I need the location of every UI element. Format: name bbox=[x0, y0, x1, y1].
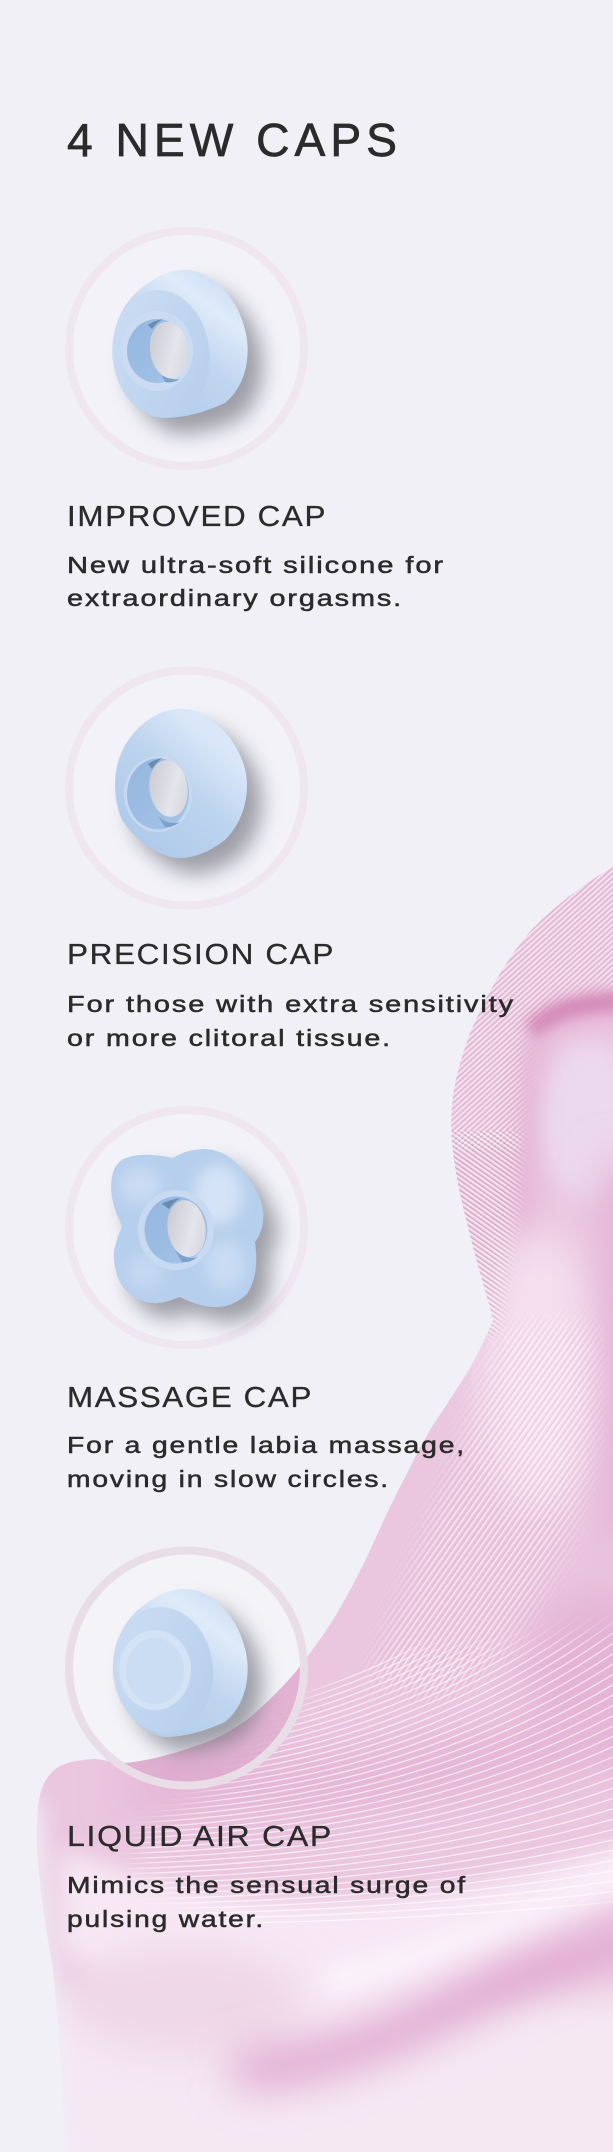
panel: massage cap bbox=[67, 1110, 466, 1492]
liquid air cap description: pulsing water. bbox=[67, 1906, 265, 1932]
improved cap description: extraordinary orgasms. bbox=[67, 585, 403, 611]
liquid air cap heading: LIQUID AIR CAP bbox=[67, 1821, 333, 1853]
improved cap ring bbox=[69, 231, 304, 466]
liquid air cap description bbox=[67, 1872, 467, 1932]
circle interior: liquid air cap glow bbox=[68, 1550, 304, 1786]
precision cap heading: PRECISION CAP bbox=[67, 939, 335, 971]
soft fade along fabric lower left edge bbox=[28, 1800, 56, 2152]
massage cap description: For a gentle labia massage, bbox=[67, 1432, 466, 1458]
pink wavy fabric background bbox=[0, 850, 613, 2152]
liquid air cap ring bbox=[69, 1550, 304, 1786]
panel: precision cap bbox=[67, 670, 515, 1051]
fabric tint inside ring bbox=[124, 1666, 300, 1782]
fabric centre streaks bbox=[369, 1319, 601, 1704]
icon: liquid air cap bbox=[107, 1589, 263, 1752]
icon: improved cap bbox=[106, 270, 263, 434]
fabric flowing lines bbox=[131, 1620, 613, 1924]
panel: improved cap bbox=[67, 231, 445, 611]
precision cap description: or more clitoral tissue. bbox=[67, 1025, 392, 1051]
icon: massage cap bbox=[111, 1149, 277, 1322]
panel: liquid air cap bbox=[67, 1550, 467, 1932]
fabric rim texture bottom bbox=[452, 1130, 525, 1340]
precision cap description bbox=[67, 991, 515, 1051]
improved cap description bbox=[67, 552, 445, 611]
precision cap ring bbox=[69, 670, 304, 906]
precision cap description: For those with extra sensitivity bbox=[67, 991, 515, 1017]
fabric rim texture top bbox=[452, 868, 613, 1150]
improved cap heading: IMPROVED CAP bbox=[67, 501, 327, 533]
massage cap ring bbox=[69, 1110, 304, 1345]
icon: precision cap bbox=[115, 709, 262, 874]
liquid air cap description: Mimics the sensual surge of bbox=[67, 1872, 467, 1898]
massage cap heading: MASSAGE CAP bbox=[67, 1382, 313, 1414]
title: 4 NEW CAPS bbox=[67, 114, 402, 166]
improved cap description: New ultra-soft silicone for bbox=[67, 552, 445, 578]
massage cap description: moving in slow circles. bbox=[67, 1466, 390, 1492]
fabric lower pale area bbox=[0, 1990, 613, 2152]
massage cap description bbox=[67, 1432, 466, 1492]
fabric dark fold bbox=[235, 1916, 613, 2070]
